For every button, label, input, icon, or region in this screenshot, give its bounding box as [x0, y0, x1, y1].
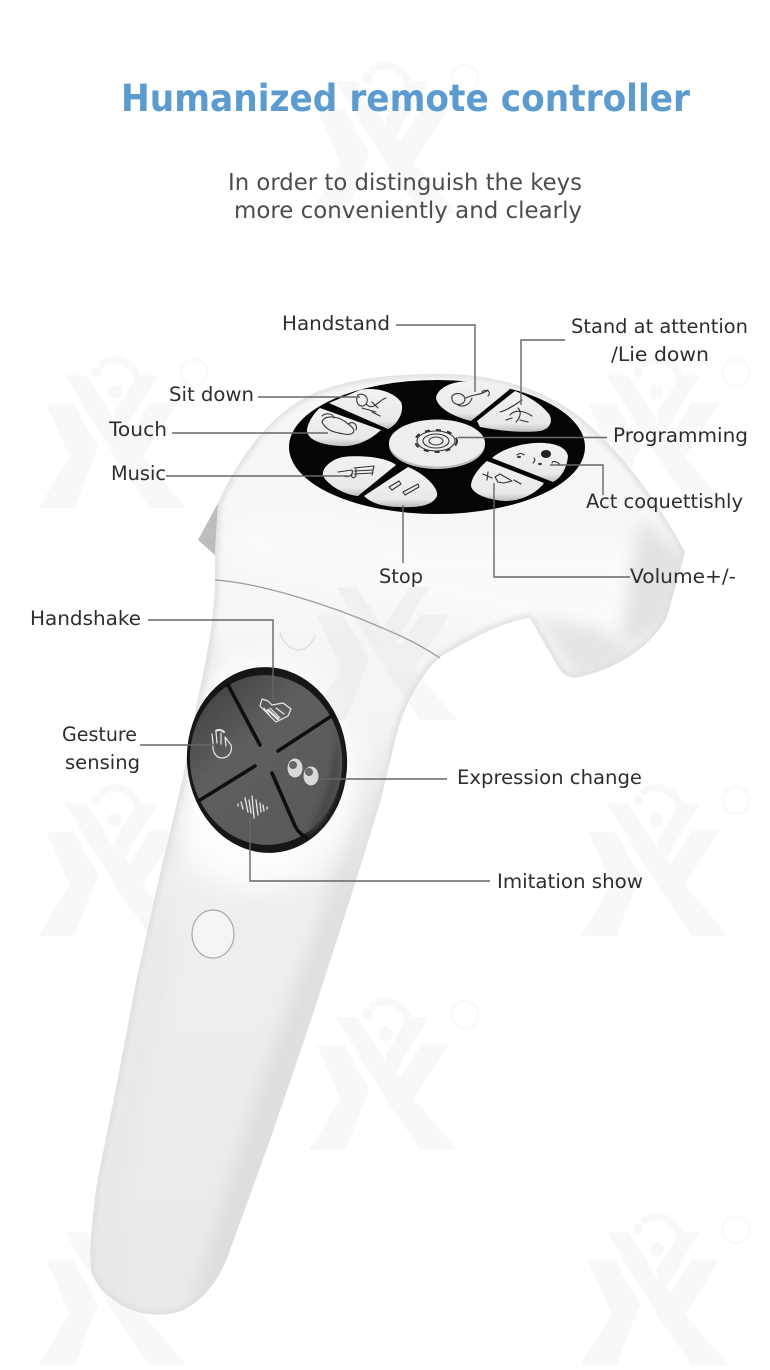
label: Volume+/-: Volume+/-	[630, 565, 736, 588]
subtitle: In order to distinguish the keys	[228, 168, 582, 196]
key: stop	[364, 467, 437, 507]
icon: sound wave	[238, 796, 267, 818]
title: Humanized remote controller	[121, 77, 691, 120]
key: touch	[307, 408, 381, 446]
icon: gesture hand	[212, 730, 231, 758]
body shading	[90, 374, 690, 1315]
dial face	[183, 669, 349, 851]
key: music	[323, 456, 396, 496]
key: handstand	[436, 381, 510, 421]
label: Programming: Programming	[613, 424, 748, 447]
label: Stand at attention / Lie down	[571, 315, 748, 366]
label: Touch: Touch	[108, 418, 167, 441]
label: Stand at attention / Lie down: Stand at attention	[571, 315, 748, 338]
label: Stand at attention / Lie down: /Lie down	[611, 343, 709, 366]
label: Gesture sensing	[62, 723, 140, 774]
top keypad buttons	[307, 381, 568, 507]
left fin	[198, 503, 218, 556]
remote controller	[90, 374, 690, 1315]
gesture dial	[179, 660, 355, 860]
label: Act coquettishly: Act coquettishly	[586, 490, 743, 513]
label: Handshake: Handshake	[30, 607, 141, 630]
key: volume	[471, 461, 544, 501]
side oval button	[192, 910, 234, 958]
seam line	[215, 580, 440, 658]
key: stand at attention	[477, 391, 551, 432]
label: Gesture sensing: sensing	[65, 751, 140, 774]
label: Stop: Stop	[379, 565, 423, 588]
icon: eyes	[288, 758, 318, 786]
key: programming gear	[389, 420, 485, 469]
key: act coquettishly	[492, 443, 568, 482]
dial slots	[200, 685, 333, 838]
body watermark tint	[324, 588, 428, 720]
label: Gesture sensing: Gesture	[62, 723, 137, 746]
icon: handshake	[260, 699, 291, 722]
label: Expression change: Expression change	[457, 766, 642, 789]
leader lines	[140, 325, 630, 881]
dial outer ring	[179, 660, 355, 860]
rear round button	[280, 632, 315, 650]
controller body	[90, 374, 685, 1315]
label: Sit down: Sit down	[169, 383, 254, 406]
label: Imitation show: Imitation show	[497, 870, 643, 893]
key: sit down	[329, 389, 402, 429]
body edge shading	[90, 374, 685, 1315]
dial bevel	[304, 730, 340, 838]
black button well	[289, 380, 585, 514]
subtitle	[228, 168, 582, 224]
label: Music: Music	[111, 462, 166, 485]
label: Handstand: Handstand	[282, 312, 390, 335]
subtitle: more conveniently and clearly	[234, 196, 582, 224]
